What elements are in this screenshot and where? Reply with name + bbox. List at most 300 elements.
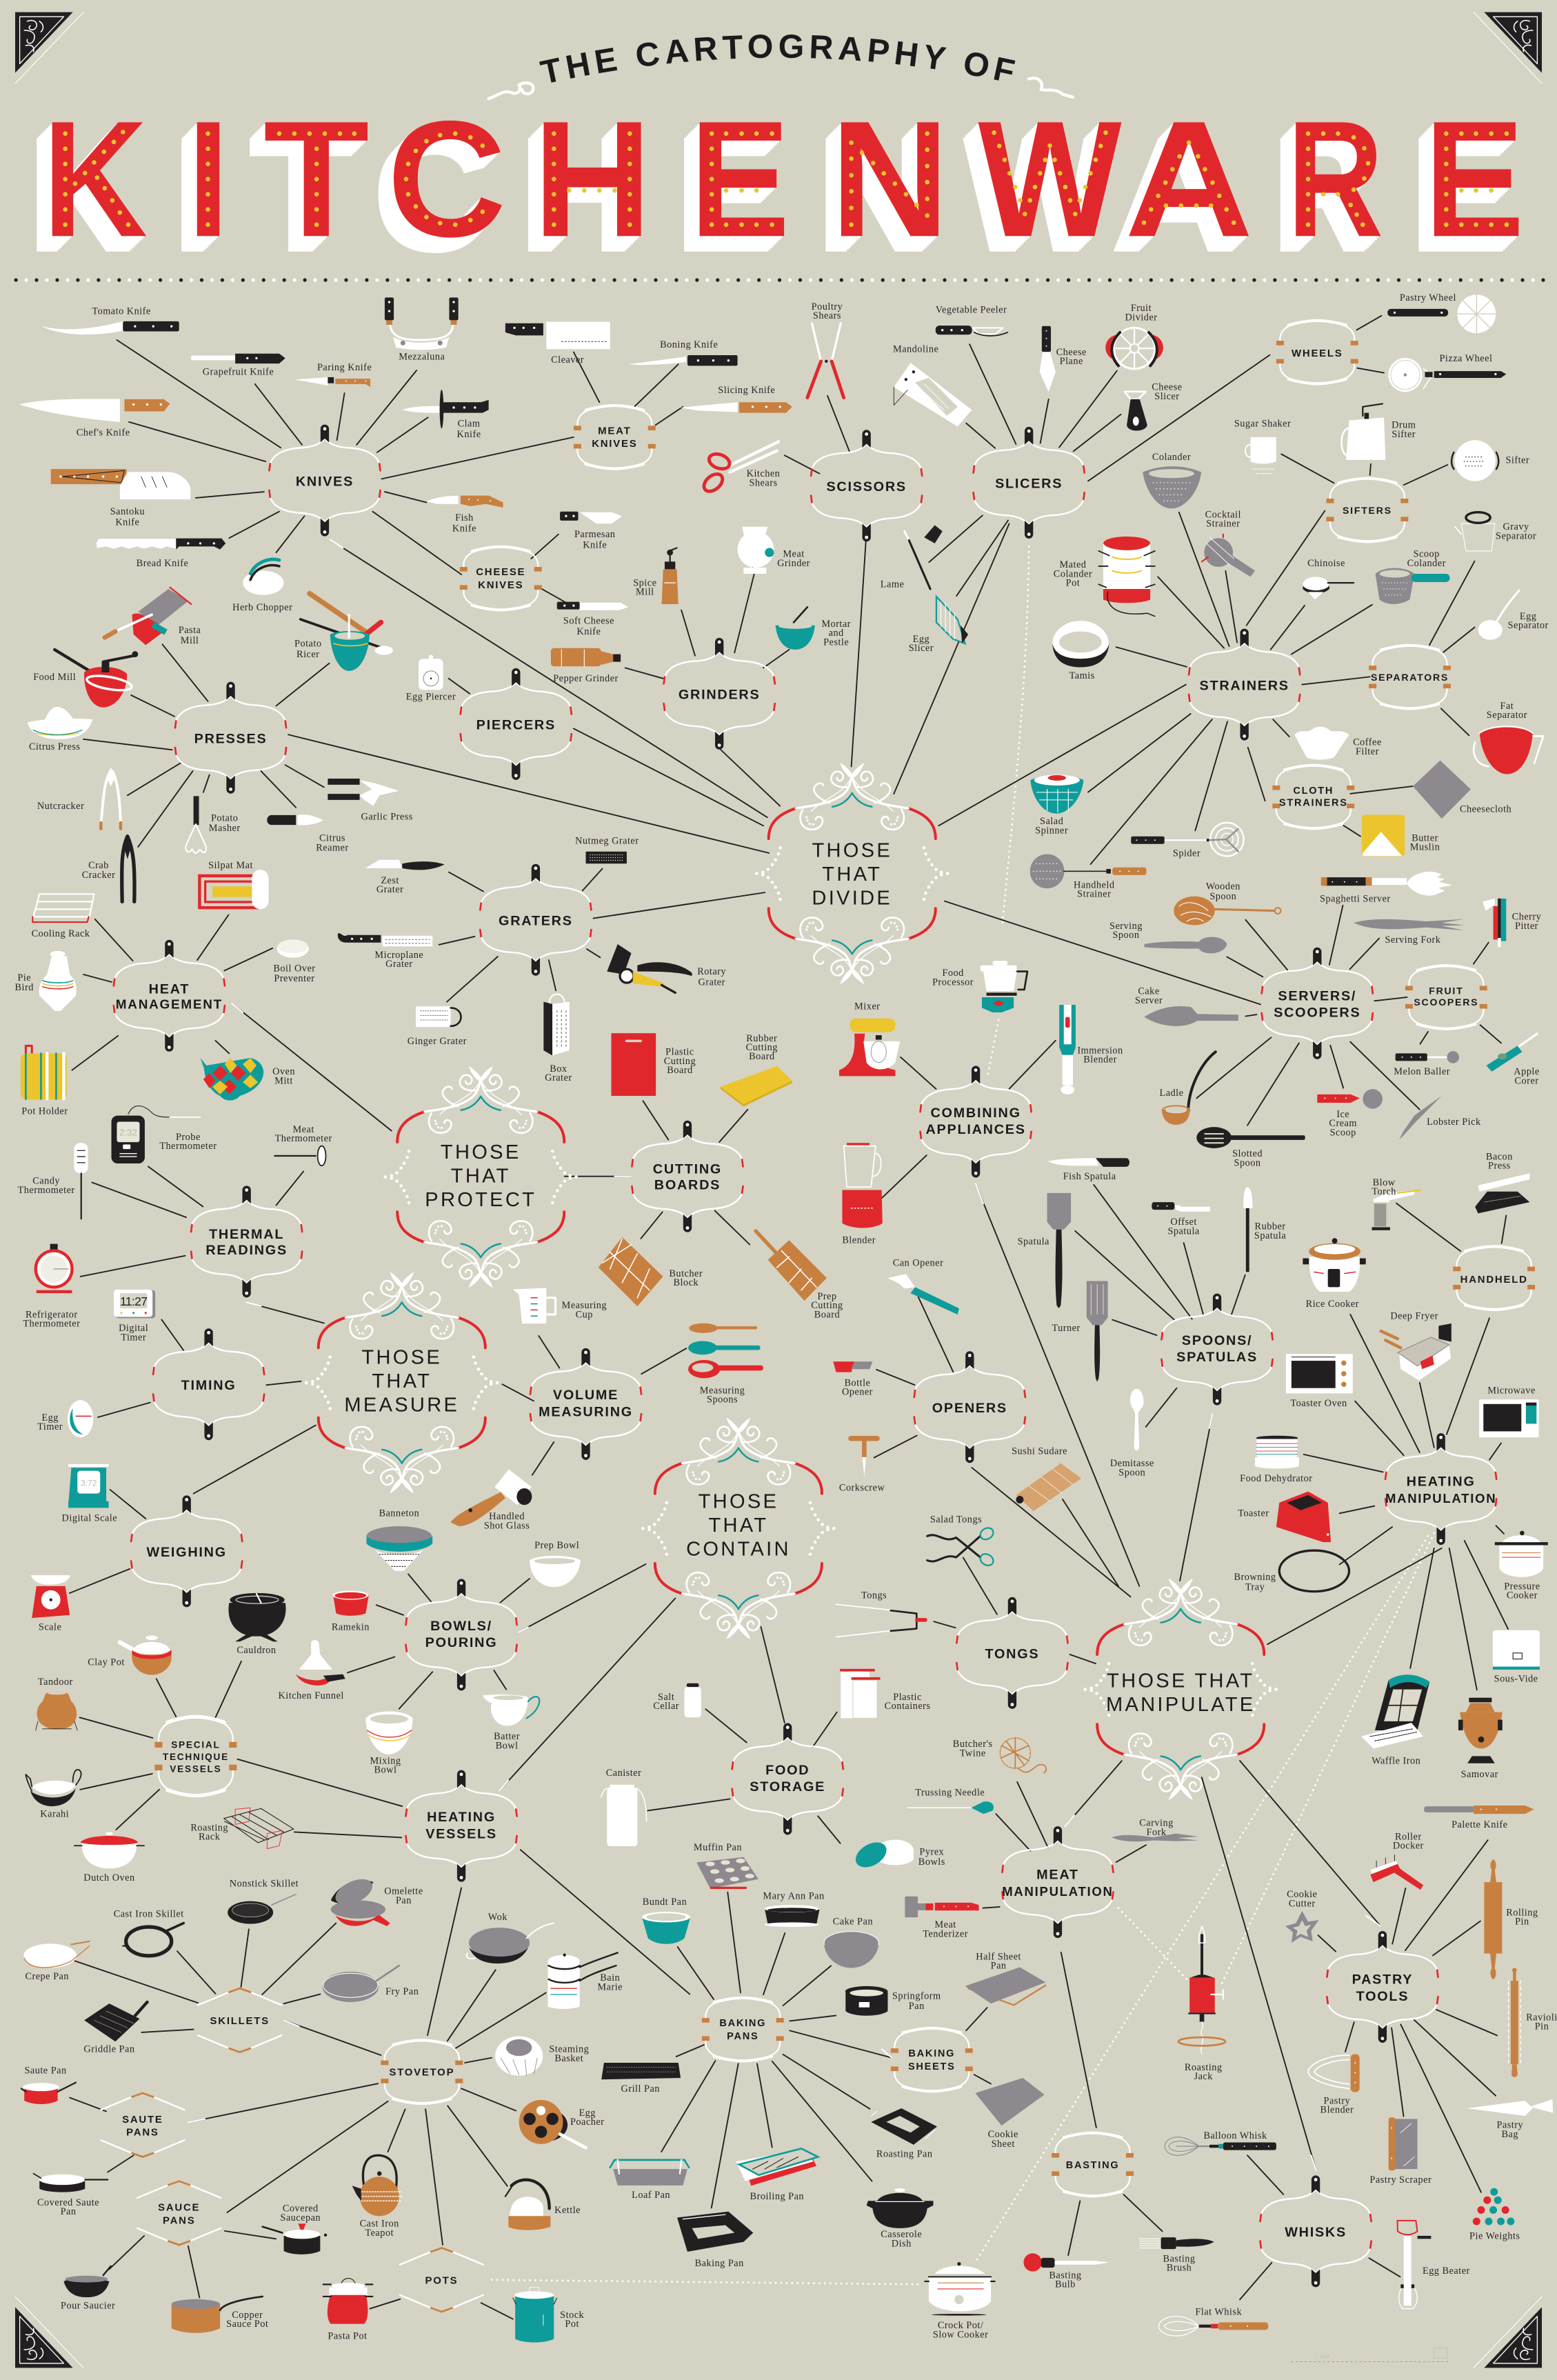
tool: Sous-Vide: Sous-Vide <box>1494 1674 1538 1685</box>
node: Food Storage: STORAGE <box>750 1779 825 1794</box>
node: Special Technique Vessels: TECHNIQUE <box>163 1752 229 1762</box>
tool: Fish Spatula: Fish Spatula <box>1063 1171 1116 1182</box>
tool: Chinoise: Chinoise <box>1307 558 1345 569</box>
tool: Candy Thermometer: Candy <box>32 1176 60 1187</box>
tool: Serving Spoon: Spoon <box>1112 930 1139 941</box>
big node: Those That Protect: THAT <box>451 1166 511 1188</box>
node: Cutting Boards: CUTTING <box>653 1161 722 1177</box>
tool: Sifter <box>1451 440 1529 481</box>
node: Baking Pans: BAKING <box>719 2018 766 2029</box>
tool: Probe Thermometer: Thermometer <box>159 1141 217 1152</box>
tool: Serving Fork <box>1354 919 1465 946</box>
tool: Palette Knife: Palette Knife <box>1451 1819 1507 1830</box>
tool: Cake Server: Cake <box>1138 986 1160 997</box>
tool: Roasting Jack: Jack <box>1194 2071 1213 2082</box>
tool: Crepe Pan <box>23 1941 90 1982</box>
tool: Probe Thermometer <box>112 1106 217 1163</box>
tool: Pasta Pot: Pasta Pot <box>328 2331 368 2342</box>
tool: Grapefruit Knife <box>191 354 285 378</box>
title: KITCHENWARE marquee letters: A <box>1125 86 1254 271</box>
tool: Ice Cream Scoop: Ice <box>1336 1109 1349 1120</box>
tool: Muffin Pan <box>694 1842 759 1889</box>
title: KITCHENWARE marquee letters: T <box>263 87 370 272</box>
tool: Egg Separator: Egg <box>1520 611 1536 622</box>
node: Volume Measuring <box>530 1348 641 1460</box>
tool: Vegetable Peeler <box>936 304 1007 336</box>
tool: Egg Piercer: Egg Piercer <box>406 692 456 703</box>
node: Heating Vessels <box>405 1770 517 1882</box>
tool: Nutcracker: Nutcracker <box>37 801 84 812</box>
node: Skillets: SKILLETS <box>210 2015 270 2027</box>
tool: Salad Spinner: Salad <box>1040 816 1063 827</box>
tool: Mixing Bowl: Mixing <box>370 1755 401 1766</box>
tool: Scoop Colander: Scoop <box>1414 549 1440 560</box>
tool: Poultry Shears: Poultry <box>812 301 843 312</box>
tool: Clay Pot <box>88 1635 172 1675</box>
tool: Spice Mill: Spice <box>633 578 656 589</box>
tool: Cookie Cutter: Cutter <box>1289 1898 1316 1909</box>
tool: Cast Iron Teapot: Cast Iron <box>360 2219 399 2230</box>
tool: Loaf Pan: Loaf Pan <box>632 2190 670 2201</box>
tool: Handled Shot Glass <box>451 1469 532 1531</box>
tool: Tomato Knife <box>42 306 179 334</box>
tool: Cookie Sheet: Cookie <box>988 2129 1018 2140</box>
tool: Cookie Sheet <box>975 2078 1045 2150</box>
tool: Griddle Pan <box>83 2002 147 2055</box>
tool: Roasting Rack: Rack <box>199 1831 221 1842</box>
node: Fruit Scoopers: SCOOPERS <box>1414 997 1478 1008</box>
tool: Copper Sauce Pot: Sauce Pot <box>226 2319 268 2330</box>
tool: Meat Grinder <box>738 527 810 574</box>
tool: Rotary Grater: Rotary <box>697 966 726 977</box>
tool: Egg Timer <box>37 1400 93 1437</box>
node: Grinders <box>664 638 775 750</box>
dotted connections <box>492 546 1434 2284</box>
tool: Poultry Shears <box>807 301 844 398</box>
tool: Blow Torch <box>1372 1177 1420 1230</box>
tool: Basting Bulb <box>1023 2253 1109 2290</box>
tool: Zest Grater: Zest <box>381 875 399 886</box>
tool: Copper Sauce Pot: Copper <box>232 2310 263 2321</box>
tool: Basting Bulb: Basting <box>1049 2270 1081 2281</box>
tool: Pie Weights <box>1469 2188 1520 2241</box>
tool: Slotted Spoon: Slotted <box>1232 1148 1263 1159</box>
tool: Silpat Mat: Silpat Mat <box>208 860 253 871</box>
node: Sifters <box>1326 479 1408 541</box>
tool: Salad Spinner: Spinner <box>1035 825 1068 836</box>
tool: Citrus Press <box>28 707 92 752</box>
tool: Meat Thermometer <box>274 1124 332 1166</box>
tool: Springform Pan: Pan <box>909 2001 925 2012</box>
tool: Mated Colander Pot: Mated <box>1059 559 1086 570</box>
node: Saute Pans <box>101 2093 184 2157</box>
tool: Offset Spatula <box>1152 1202 1210 1237</box>
tool: Microplane Grater: Microplane <box>374 950 423 961</box>
node: Weighing <box>131 1495 242 1607</box>
node: Wheels <box>1276 321 1358 383</box>
tool: Rubber Spatula: Rubber <box>1255 1221 1286 1232</box>
tool: Butcher's Twine <box>953 1738 1046 1773</box>
title: KITCHENWARE marquee letters: W <box>978 86 1122 271</box>
node: Spoons/Spatulas: SPATULAS <box>1176 1350 1258 1365</box>
node: Grinders: GRINDERS <box>679 688 760 703</box>
big node: Those That Measure: THAT <box>372 1370 432 1392</box>
tool: Apple Corer <box>1486 1034 1540 1086</box>
tool: Trussing Needle: Trussing Needle <box>915 1788 985 1799</box>
tool: Kitchen Shears <box>701 441 780 494</box>
node: Graters: GRATERS <box>499 913 573 928</box>
tool: Silpat Mat <box>198 860 269 909</box>
node: Saute Pans: SAUTE <box>122 2114 163 2126</box>
tool: Pasta Pot <box>323 2279 372 2342</box>
tool: Canister: Canister <box>606 1768 641 1779</box>
tool: Clam Knife: Knife <box>457 429 481 440</box>
tool: Salad Spinner <box>1030 775 1083 836</box>
node: Fruit Scoopers: FRUIT <box>1429 986 1463 997</box>
tool: Deep Fryer: Deep Fryer <box>1390 1311 1438 1322</box>
tool: Handheld Strainer: Handheld <box>1074 880 1114 891</box>
tool: Clam Knife <box>402 390 489 440</box>
tool: Ladle <box>1160 1052 1216 1125</box>
tool: Vegetable Peeler: Vegetable Peeler <box>936 304 1007 315</box>
tool: Meat Grinder: Meat <box>783 549 805 560</box>
tool: Crab Cracker <box>82 834 134 901</box>
tool: Browning Tray <box>1234 1550 1349 1592</box>
tool: Waffle Iron: Waffle Iron <box>1372 1755 1420 1766</box>
node: Bowls/Pouring: POURING <box>425 1635 497 1650</box>
tool: Melon Baller <box>1394 1051 1459 1077</box>
tool: Egg Timer: Egg <box>41 1412 59 1423</box>
tool: Kitchen Shears: Kitchen <box>747 468 780 479</box>
tool: Rolling Pin <box>1484 1859 1538 1979</box>
tool: Casserole Dish: Casserole <box>881 2229 922 2240</box>
node: Knives <box>269 425 381 537</box>
tool: Copper Sauce Pot <box>172 2297 268 2333</box>
tool: Mandoline <box>893 344 972 426</box>
node: Heating Vessels: HEATING <box>427 1810 496 1825</box>
tool: Bain Marie: Marie <box>597 1981 623 1992</box>
tool: Pie Bird: Bird <box>15 982 34 993</box>
node: Cloth Strainers <box>1272 766 1354 828</box>
node: Basting <box>1052 2133 1134 2196</box>
tool: Dutch Oven <box>74 1832 144 1883</box>
tool: Nutmeg Grater <box>575 836 639 863</box>
node: Separators <box>1369 646 1451 708</box>
tool: Cheese Plane: Plane <box>1060 356 1083 367</box>
tool: Covered Saucepan: Covered <box>283 2203 319 2214</box>
big node: Those That Protect: PROTECT <box>425 1189 536 1211</box>
tool: Ginger Grater: Ginger Grater <box>408 1036 467 1047</box>
tool: Food Mill <box>33 650 138 708</box>
tool: Plastic Containers: Plastic <box>893 1692 922 1703</box>
node: Baking Sheets <box>891 2028 973 2091</box>
tool: Basting Brush <box>1140 2237 1214 2274</box>
big node: Those That Protect: THOSE <box>441 1141 521 1163</box>
tool: Digital Timer: Timer <box>121 1332 146 1343</box>
node: Sauce Pans: PANS <box>163 2214 195 2226</box>
tool: Digital Timer: Digital <box>119 1323 148 1334</box>
tool: Mezzaluna: Mezzaluna <box>399 352 445 363</box>
tool: Basting Brush: Basting <box>1163 2253 1196 2264</box>
tool: Egg Poacher: Poacher <box>570 2117 604 2128</box>
node: Weighing: WEIGHING <box>147 1545 227 1560</box>
tool: Rubber Cutting Board <box>721 1033 792 1106</box>
tool: Clay Pot: Clay Pot <box>88 1657 125 1668</box>
tool: Half Sheet Pan <box>965 1951 1045 2005</box>
tool: Trussing Needle <box>907 1788 994 1814</box>
node: Slicers: SLICERS <box>995 477 1063 492</box>
tool: Toaster <box>1238 1492 1331 1542</box>
tool: Demitasse Spoon: Spoon <box>1118 1467 1145 1478</box>
node: Special Technique Vessels: SPECIAL <box>171 1739 221 1750</box>
tool: Casserole Dish <box>867 2188 933 2249</box>
tool: Wooden Spoon: Wooden <box>1206 881 1240 892</box>
node: Presses: PRESSES <box>194 731 267 746</box>
tool: Basting Brush: Brush <box>1167 2263 1192 2274</box>
tool: Ravioli Pin <box>1509 1968 1557 2077</box>
tool: Meat Grinder: Grinder <box>777 558 810 569</box>
tool: Pour Saucier <box>61 2266 115 2312</box>
tool: Saute Pan: Saute Pan <box>24 2065 67 2076</box>
tool: Pot Holder: Pot Holder <box>21 1106 68 1117</box>
tool: Fat Separator: Separator <box>1487 710 1527 721</box>
tool: Batter Bowl: Batter <box>494 1731 520 1742</box>
tool: Ramekin: Ramekin <box>332 1622 370 1633</box>
tool: Lame <box>881 526 943 590</box>
tool: Bottle Opener <box>833 1361 873 1398</box>
big node: Those That Divide <box>756 763 947 984</box>
node: Sauce Pans: SAUCE <box>158 2202 200 2214</box>
tool: Bacon Press <box>1475 1151 1529 1213</box>
tool: Pizza Wheel <box>1388 353 1506 392</box>
tool: Pastry Bag <box>1467 2099 1553 2140</box>
tool: Steaming Basket: Basket <box>554 2053 583 2064</box>
tool: Digital Timer: 11:27 <box>120 1294 147 1308</box>
big node: Those That Measure: THOSE <box>361 1347 442 1369</box>
tool: Colander <box>1143 452 1201 508</box>
tool: Tamis: Tamis <box>1069 670 1095 681</box>
node: Heating Vessels: VESSELS <box>425 1826 497 1841</box>
tool: Cake Pan <box>824 1917 878 1968</box>
tool: Browning Tray: Browning <box>1234 1572 1276 1583</box>
tool: Pastry Blender: Blender <box>1320 2105 1354 2116</box>
node: Graters <box>480 864 591 976</box>
node: Slicers <box>974 427 1085 539</box>
tool: Steaming Basket <box>495 2036 589 2076</box>
tool: Slicing Knife <box>680 385 792 413</box>
node: Baking Pans: PANS <box>727 2031 759 2042</box>
tool: Prep Bowl: Prep Bowl <box>534 1540 579 1551</box>
tool: Sushi Sudare: Sushi Sudare <box>1012 1446 1067 1457</box>
tool: Salad Tongs: Salad Tongs <box>930 1514 982 1525</box>
tool: Slotted Spoon <box>1196 1127 1305 1168</box>
tool: Toaster Oven: Toaster Oven <box>1290 1398 1347 1409</box>
tool: Measuring Spoons <box>688 1323 763 1406</box>
title: KITCHENWARE marquee letters: I <box>187 87 230 272</box>
tool: Food Dehydrator <box>1240 1436 1313 1484</box>
tool: Zest Grater: Grater <box>376 884 403 895</box>
tool: Digital Timer <box>114 1290 155 1343</box>
tool: Digital Scale: Digital Scale <box>62 1512 117 1523</box>
tool: Blender: Blender <box>842 1235 876 1246</box>
tool: Pastry Wheel <box>1387 292 1496 333</box>
tool: Soft Cheese Knife <box>557 602 628 637</box>
tool: Cocktail Strainer: Strainer <box>1206 519 1240 530</box>
tool: Citrus Reamer: Reamer <box>316 843 349 854</box>
tool: Salt Cellar <box>653 1683 701 1717</box>
node: Heating Manipulation: HEATING <box>1407 1474 1476 1490</box>
tool: Grill Pan: Grill Pan <box>621 2083 660 2094</box>
tool: Pot Holder <box>21 1046 68 1117</box>
node: Baking Sheets: BAKING <box>908 2048 955 2059</box>
node: Pastry Tools: TOOLS <box>1356 1989 1409 2004</box>
node: Cutting Boards: BOARDS <box>654 1177 721 1192</box>
node: Pastry Tools <box>1327 1931 1438 2043</box>
tool: Lobster Pick <box>1399 1096 1481 1139</box>
tool: Butter Muslin: Muslin <box>1410 841 1440 853</box>
tool: Oven Mitt: Oven <box>272 1066 295 1077</box>
tool: Scale <box>31 1575 70 1633</box>
tool: Cheese Slicer: Cheese <box>1152 382 1183 393</box>
tool: Mary Ann Pan: Mary Ann Pan <box>763 1890 825 1901</box>
big node: Those That Manipulate: THOSE THAT <box>1107 1670 1254 1692</box>
tool: Mated Colander Pot <box>1054 537 1155 617</box>
node: Saute Pans: PANS <box>126 2127 159 2139</box>
tool: Egg Separator: Separator <box>1508 620 1549 631</box>
tool: Serving Fork: Serving Fork <box>1385 934 1441 946</box>
tool: Handheld Strainer <box>1030 854 1146 900</box>
tool: Potato Ricer: Potato <box>294 639 321 650</box>
tool: Roasting Rack: Roasting <box>190 1822 228 1833</box>
tool: Ravioli Pin: Pin <box>1535 2021 1549 2032</box>
tool: Balloon Whisk <box>1165 2130 1276 2155</box>
tool: Soft Cheese Knife: Soft Cheese <box>563 616 614 627</box>
tool: Bread Knife <box>97 539 225 569</box>
big node: Those That Protect <box>385 1066 576 1288</box>
tool: Garlic Press <box>328 779 413 822</box>
node: Baking Sheets: SHEETS <box>908 2061 956 2072</box>
tool: Handled Shot Glass: Handled <box>489 1511 525 1522</box>
tool: Mixing Bowl <box>365 1712 413 1776</box>
node: Cheese Knives <box>460 547 542 610</box>
tool: Carving Fork: Carving <box>1139 1818 1174 1829</box>
tool: Gravy Separator: Separator <box>1496 530 1536 541</box>
tool: Saute Pan <box>21 2065 76 2104</box>
node: Food Storage: FOOD <box>765 1763 810 1778</box>
tool: Meat Tenderizer: Meat <box>934 1919 956 1930</box>
tool: Citrus Reamer: Citrus <box>319 832 345 843</box>
tool: Egg Poacher: Egg <box>579 2108 596 2119</box>
tool: Drum Sifter: Sifter <box>1392 429 1416 440</box>
tool: Rubber Spatula: Spatula <box>1254 1230 1286 1241</box>
tool: Baking Pan: Baking Pan <box>695 2258 744 2269</box>
tool: Immersion Blender <box>1059 1005 1123 1094</box>
tool: Rubber Cutting Board: Board <box>749 1051 774 1062</box>
tool: Prep Cutting Board: Prep <box>817 1291 837 1302</box>
tool: Salt Cellar: Salt <box>658 1692 674 1703</box>
tool: Ice Cream Scoop <box>1317 1089 1383 1138</box>
tool: Basting Bulb: Bulb <box>1055 2279 1076 2290</box>
node: Tongs <box>956 1597 1067 1709</box>
tool: Nutmeg Grater: Nutmeg Grater <box>575 836 639 847</box>
tool: Pressure Cooker: Pressure <box>1504 1581 1540 1592</box>
tool: Meat Thermometer: Thermometer <box>275 1133 332 1144</box>
tool: Parmesan Knife: Parmesan <box>574 529 615 540</box>
tool: Butcher Block <box>599 1237 703 1306</box>
tool: Broiling Pan <box>736 2148 818 2202</box>
tool: Roasting Pan: Roasting Pan <box>876 2148 932 2159</box>
tool: Cast Iron Teapot <box>352 2155 402 2239</box>
tool: Gravy Separator: Gravy <box>1503 521 1529 532</box>
tool: Corkscrew: Corkscrew <box>839 1482 885 1493</box>
tool: Crock Pot <box>925 2262 995 2340</box>
tool: Springform Pan: Springform <box>892 1991 941 2002</box>
tool: Wooden Spoon: Spoon <box>1209 891 1236 902</box>
node: Meat Manipulation: MEAT <box>1036 1868 1079 1883</box>
tool: Offset Spatula: Offset <box>1170 1217 1197 1228</box>
tool: Casserole Dish: Dish <box>892 2238 912 2249</box>
tool: Roasting Jack <box>1178 1926 1225 2082</box>
tool: Rubber Cutting Board: Rubber <box>746 1033 777 1044</box>
tool: Mixer: Mixer <box>854 1001 880 1012</box>
tool: Broiling Pan: Broiling Pan <box>750 2191 804 2202</box>
tool: Melon Baller: Melon Baller <box>1394 1066 1450 1077</box>
tool: Cast Iron Skillet: Cast Iron Skillet <box>114 1909 184 1920</box>
tool: Plastic Cutting Board: Board <box>667 1065 693 1076</box>
tool: Measuring Cup: Cup <box>576 1309 593 1320</box>
tool: Pour Saucier: Pour Saucier <box>61 2301 115 2312</box>
tool: Cast Iron Teapot: Teapot <box>365 2228 394 2239</box>
tool: Pastry Scraper: Pastry Scraper <box>1369 2174 1432 2186</box>
tool: Prep Cutting Board <box>756 1231 843 1320</box>
node: Heating Manipulation <box>1385 1433 1496 1545</box>
node: Servers/Scoopers: SCOOPERS <box>1274 1006 1360 1021</box>
tool: Batter Bowl <box>483 1694 539 1751</box>
tool: Potato Masher: Potato <box>211 813 238 824</box>
node: Servers/Scoopers <box>1262 948 1373 1059</box>
tool: Half Sheet Pan: Pan <box>991 1961 1007 1972</box>
tool: Probe Thermometer: 2:32 <box>119 1127 137 1137</box>
tool: Bain Marie <box>548 1952 623 2009</box>
tool: Measuring Spoons: Spoons <box>707 1394 738 1406</box>
tool: Chef's Knife: Chef's Knife <box>77 428 130 439</box>
node: Servers/Scoopers: SERVERS/ <box>1278 988 1356 1003</box>
corner ornament bottom right <box>1474 2297 1542 2368</box>
tool: Egg Beater: Egg Beater <box>1423 2266 1470 2277</box>
footer edition mark: / 500 <box>1316 2353 1329 2360</box>
node: Meat Knives: KNIVES <box>592 438 637 450</box>
node: Openers: OPENERS <box>932 1401 1007 1416</box>
tool: Pie Weights: Pie Weights <box>1469 2230 1520 2241</box>
tool: Zest Grater <box>365 860 445 895</box>
tool: Egg Timer: Timer <box>37 1421 63 1432</box>
tool: Covered Saucepan <box>263 2203 327 2254</box>
title: The Cartography of: THE CARTOGRAPHY OF <box>539 34 1015 83</box>
tool: Cooling Rack: Cooling Rack <box>32 928 90 939</box>
tool: Blender <box>842 1143 883 1246</box>
tool: Pastry Blender <box>1308 2054 1360 2116</box>
node: Heat Management: HEAT <box>149 981 190 997</box>
tool: Covered Saute Pan: Covered Saute <box>37 2197 99 2208</box>
tool: Handheld Strainer: Strainer <box>1077 889 1111 900</box>
tool: Box Grater: Box <box>550 1063 567 1074</box>
tool: Palette Knife <box>1424 1806 1534 1830</box>
tool: Bottle Opener: Bottle <box>845 1377 870 1388</box>
node: Stovetop: STOVETOP <box>389 2067 454 2079</box>
tool: Nonstick Skillet <box>228 1879 299 1924</box>
node: Combining Appliances: COMBINING <box>930 1106 1021 1121</box>
tool: Butcher's Twine: Butcher's <box>953 1739 993 1750</box>
